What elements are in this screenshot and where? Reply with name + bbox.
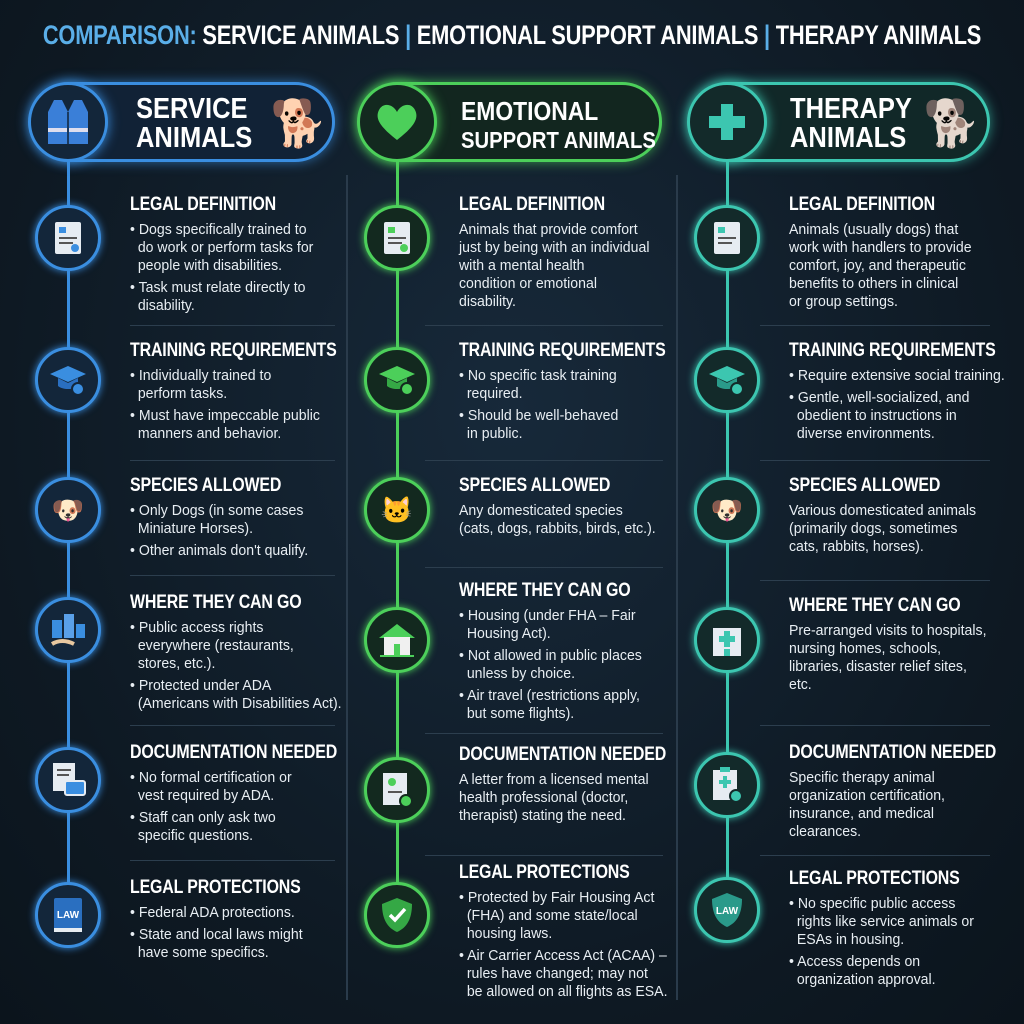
text: training (ESA): • No specific task training	[459, 367, 617, 384]
text: species (service): • Only Dogs (in some cases	[130, 502, 303, 519]
text: legal protections (therapy): • No specific public access	[789, 895, 955, 912]
text: legal definition (therapy): benefits to others in clinical	[789, 275, 958, 292]
text: training (ESA): in public.	[467, 425, 522, 442]
text: legal definition (service): people with disabilities.	[138, 257, 282, 274]
text: legal protections (ESA): be allowed on all flights as ESA.	[467, 983, 667, 1000]
text: legal definition (therapy): LEGAL DEFINITION	[789, 194, 935, 215]
text: where (ESA): but some flights).	[467, 705, 574, 722]
icon: dogs (service): 🐶	[52, 494, 84, 524]
icon: dog: 🐕	[270, 97, 327, 149]
text: where (service): WHERE THEY CAN GO	[130, 592, 302, 613]
text: legal protections (service): • Federal ADA protections.	[130, 904, 295, 921]
text: documentation (therapy)	[789, 742, 996, 840]
text: species (therapy): (primarily dogs, sometimes	[789, 520, 957, 537]
heading: therapy animals: THERAPY	[790, 93, 912, 125]
heading: emotional support animals: SUPPORT ANIMALS	[461, 127, 656, 153]
text: where (therapy): libraries, disaster relief sites,	[789, 658, 967, 675]
text: documentation (service)	[130, 742, 337, 844]
text: legal protections (therapy): LEGAL PROTECTIONS	[789, 868, 960, 889]
text: legal protections (ESA): (FHA) and some state/local	[467, 907, 638, 924]
text: legal protections (therapy): ESAs in housing.	[797, 931, 904, 948]
text: training (service): • Individually trained to	[130, 367, 271, 384]
icon: cats (ESA)	[364, 477, 430, 543]
icon: grad cap (ESA)	[364, 347, 430, 413]
icon: law book (service): LAW	[57, 910, 80, 921]
text: species (ESA): Any domesticated species	[459, 502, 623, 519]
heading: service animals: ANIMALS	[136, 122, 252, 154]
text: where (service)	[130, 592, 342, 712]
text: legal protections (therapy): organization approval.	[797, 971, 936, 988]
text: documentation (service): • Staff can only ask two	[130, 809, 276, 826]
icon: document (therapy)	[694, 205, 760, 271]
heading: emotional support animals: EMOTIONAL	[461, 96, 598, 126]
text: documentation (therapy): Specific therapy animal	[789, 769, 935, 786]
text: where (ESA)	[459, 580, 642, 722]
icon: shield (ESA)	[364, 882, 430, 948]
text: training (ESA): TRAINING REQUIREMENTS	[459, 340, 666, 361]
icon: law shield (therapy): LAW	[716, 906, 739, 917]
icon: vest	[28, 82, 108, 162]
text: legal definition (ESA): with a mental health	[459, 257, 584, 274]
text: species (therapy)	[789, 475, 976, 555]
icon: document (ESA)	[364, 205, 430, 271]
text: documentation (service): specific questions.	[138, 827, 253, 844]
text: training (service): perform tasks.	[138, 385, 227, 402]
text: where (therapy): WHERE THEY CAN GO	[789, 595, 961, 616]
text: documentation (therapy): insurance, and medical	[789, 805, 934, 822]
text: species (ESA): SPECIES ALLOWED	[459, 475, 610, 496]
icon: letter (ESA)	[364, 757, 430, 823]
text: training (ESA): • Should be well-behaved	[459, 407, 618, 424]
heading: service animals	[136, 93, 252, 154]
text: training (service): manners and behavior.	[138, 425, 281, 442]
text: legal protections (ESA): LEGAL PROTECTIONS	[459, 862, 630, 883]
text: legal definition (ESA): disability.	[459, 293, 516, 310]
icon: therapy dog: 🐕	[923, 97, 980, 149]
text: training (therapy): TRAINING REQUIREMENTS	[789, 340, 996, 361]
text: species (therapy): cats, rabbits, horses).	[789, 538, 924, 555]
text: legal definition (ESA): condition or emotional	[459, 275, 597, 292]
heading: emotional support animals	[461, 96, 656, 153]
text: documentation (therapy): DOCUMENTATION NEEDED	[789, 742, 996, 763]
text: where (service): • Protected under ADA	[130, 677, 271, 694]
text: legal definition (therapy): work with handlers to provide	[789, 239, 972, 256]
icon: animals (therapy): 🐶	[711, 494, 743, 524]
panel: service animals header	[35, 82, 335, 162]
text: legal definition (service): • Dogs specifically trained to	[130, 221, 307, 238]
text: training (therapy): • Require extensive social training.	[789, 367, 1005, 384]
text: training (therapy): obedient to instructions in	[797, 407, 957, 424]
text: legal protections (service): have some specifics.	[138, 944, 269, 961]
text: legal definition (therapy): Animals (usually dogs) that	[789, 221, 958, 238]
text: documentation (ESA): health professional (doctor,	[459, 789, 628, 806]
icon: id doc (service)	[35, 747, 101, 813]
heading: therapy animals	[790, 93, 912, 154]
icon: animals (therapy)	[694, 477, 760, 543]
icon: document (service)	[35, 205, 101, 271]
text: legal protections (therapy): rights like service animals or	[797, 913, 974, 930]
text: training (ESA): required.	[467, 385, 522, 402]
icon: cross	[687, 82, 767, 162]
text: legal protections (therapy): • Access depends on	[789, 953, 920, 970]
text: legal definition (ESA): just by being with an individual	[459, 239, 649, 256]
text: training (service)	[130, 340, 337, 442]
text: legal protections (service)	[130, 877, 303, 961]
text: species (service): Miniature Horses).	[138, 520, 253, 537]
text: legal definition (service): do work or perform tasks for	[138, 239, 313, 256]
text: legal definition (therapy): or group settings.	[789, 293, 898, 310]
text: where (ESA): Housing Act).	[467, 625, 551, 642]
icon: heart	[357, 82, 437, 162]
text: species (ESA): (cats, dogs, rabbits, birds, etc.).	[459, 520, 656, 537]
text: training (therapy): diverse environments.	[797, 425, 935, 442]
icon: grad cap (therapy)	[694, 347, 760, 413]
text: documentation (service): DOCUMENTATION NEEDED	[130, 742, 337, 763]
text: documentation (therapy): organization certification,	[789, 787, 945, 804]
text: species (therapy): Various domesticated animals	[789, 502, 976, 519]
text: where (ESA): unless by choice.	[467, 665, 575, 682]
text: where (ESA): • Housing (under FHA – Fair	[459, 607, 636, 624]
text: documentation (ESA): therapist) stating the need.	[459, 807, 626, 824]
text: documentation (therapy): clearances.	[789, 823, 861, 840]
text: training (service): TRAINING REQUIREMENTS	[130, 340, 337, 361]
text: legal protections (ESA)	[459, 862, 667, 1000]
text: legal definition (service)	[130, 194, 314, 314]
text: legal definition (service): disability.	[138, 297, 195, 314]
text: where (therapy): Pre-arranged visits to hospitals,	[789, 622, 987, 639]
text: legal protections (ESA): rules have changed; may not	[467, 965, 648, 982]
text: documentation (ESA)	[459, 744, 666, 824]
text: legal definition (service): • Task must relate directly to	[130, 279, 306, 296]
text: where (therapy): nursing homes, schools,	[789, 640, 941, 657]
text: where (service): (Americans with Disabilities Act).	[138, 695, 342, 712]
text: where (ESA): • Not allowed in public places	[459, 647, 642, 664]
icon: dogs (service)	[35, 477, 101, 543]
text: documentation (ESA): DOCUMENTATION NEEDED	[459, 744, 666, 765]
text: legal definition (ESA): Animals that provide comfort	[459, 221, 638, 238]
text: species (service)	[130, 475, 308, 559]
text: where (ESA): WHERE THEY CAN GO	[459, 580, 631, 601]
title: COMPARISON: SERVICE ANIMALS | EMOTIONAL SUPPORT ANIMALS | THERAPY ANIMALS	[43, 20, 981, 50]
text: documentation (ESA): A letter from a licensed mental	[459, 771, 649, 788]
text: training (service): • Must have impeccable public	[130, 407, 320, 424]
text: legal protections (ESA): • Protected by Fair Housing Act	[459, 889, 654, 906]
text: documentation (service): vest required by ADA.	[138, 787, 274, 804]
text: legal definition (therapy)	[789, 194, 972, 310]
icon: grad cap (service)	[35, 347, 101, 413]
text: documentation (service): • No formal certification or	[130, 769, 292, 786]
panel: emotional support header	[362, 82, 662, 162]
text: training (ESA)	[459, 340, 666, 442]
text: legal definition (service): LEGAL DEFINITION	[130, 194, 276, 215]
text: legal protections (ESA): housing laws.	[467, 925, 552, 942]
text: training (therapy): • Gentle, well-socialized, and	[789, 389, 969, 406]
text: species (service): • Other animals don't qualify.	[130, 542, 308, 559]
icon: city (service)	[35, 597, 101, 663]
text: where (service): • Public access rights	[130, 619, 263, 636]
text: legal definition (ESA)	[458, 194, 649, 310]
text: where (therapy)	[789, 595, 987, 693]
text: legal definition (ESA): LEGAL DEFINITION	[459, 194, 605, 215]
text: species (ESA)	[459, 475, 656, 537]
icon: hospital (therapy)	[694, 607, 760, 673]
icon: cats (ESA): 🐱	[381, 494, 413, 524]
text: legal protections (ESA): • Air Carrier Access Act (ACAA) –	[459, 947, 667, 964]
text: legal definition (therapy): comfort, joy, and therapeutic	[789, 257, 966, 274]
text: where (service): everywhere (restaurants,	[138, 637, 294, 654]
text: legal protections (service): LEGAL PROTECTIONS	[130, 877, 301, 898]
text: species (service): SPECIES ALLOWED	[130, 475, 281, 496]
text: where (therapy): etc.	[789, 676, 812, 693]
heading: therapy animals: ANIMALS	[790, 122, 906, 154]
icon: house (ESA)	[364, 607, 430, 673]
icon: clipboard (therapy)	[694, 752, 760, 818]
panel: therapy header	[692, 82, 990, 162]
text: legal protections (service): • State and local laws might	[130, 926, 303, 943]
icon: law book (service)	[35, 882, 101, 948]
text: legal protections (therapy)	[789, 868, 974, 988]
text: where (service): stores, etc.).	[138, 655, 215, 672]
heading: service animals: SERVICE	[136, 93, 248, 125]
icon: law shield (therapy)	[694, 877, 760, 943]
text: training (therapy)	[789, 340, 1005, 442]
text: species (therapy): SPECIES ALLOWED	[789, 475, 940, 496]
text: where (ESA): • Air travel (restrictions apply,	[459, 687, 640, 704]
